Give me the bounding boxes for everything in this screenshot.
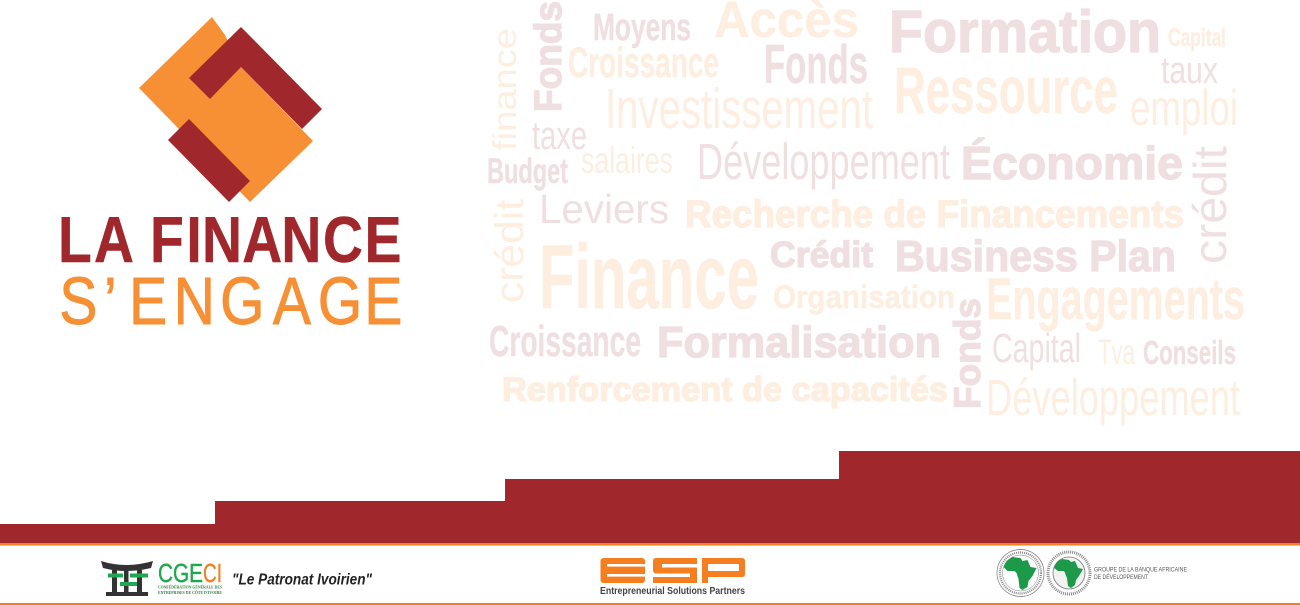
word: Leviers: Leviers (539, 186, 669, 232)
word: finance vertical: finance (486, 28, 523, 151)
word: Moyens: Moyens (593, 7, 691, 49)
icon: orange diamond (139, 17, 313, 202)
seal 1 (997, 550, 1044, 596)
icon: maroon upper bracket (189, 27, 322, 129)
word: Conseils: Conseils (1143, 334, 1236, 371)
word: Développement: Développement (697, 133, 950, 190)
word: Recherche de Financements: Recherche de Financements (685, 194, 1184, 236)
word: crédit vertical left: crédit (488, 199, 532, 303)
word: Tva: Tva (1098, 333, 1135, 372)
word: Budget: Budget (487, 152, 568, 191)
word: crédit vertical right: crédit (1184, 146, 1236, 264)
word cloud (486, 0, 1245, 426)
CGECI small caption: CONFÉDÉRATION GÉNÉRALE DES (158, 584, 223, 590)
word: Économie: Économie (961, 137, 1183, 189)
word: Finance: Finance (539, 227, 759, 328)
word: Fonds: Fonds (764, 33, 868, 95)
word: taux: taux (1161, 50, 1218, 92)
slogan: "Le Patronat Ivoirien" (232, 572, 372, 588)
word: emploi: emploi (1130, 80, 1238, 136)
icon: temple (101, 561, 153, 596)
word: taxe: taxe (532, 114, 587, 158)
word: Croissance: Croissance (568, 39, 719, 87)
CGECI wordmark: CGE (158, 558, 203, 588)
word: Investissement: Investissement (605, 77, 873, 141)
CGECI small caption: ENTREPRISES DE CÔTE D'IVOIRE (158, 590, 222, 595)
word: Organisation: Organisation (773, 279, 955, 315)
logo title: La Finance: LA FINANCE (58, 203, 402, 276)
orange rule under band (0, 543, 1300, 546)
word: Fonds vertical lower: Fonds (947, 298, 988, 409)
word: Croissance lower: Croissance (489, 317, 641, 366)
seal 2 (1048, 552, 1090, 594)
word: Capital small: Capital (1168, 24, 1226, 52)
word: Crédit: Crédit (770, 234, 873, 275)
group name: DE DÉVELOPPEMENT (1094, 572, 1148, 581)
word: Business Plan: Business Plan (895, 232, 1176, 281)
logo: ESP (600, 558, 745, 597)
logo: CGECI (101, 558, 372, 596)
orange bottom rule (0, 603, 1300, 605)
ESP tagline: Entrepreneurial Solutions Partners (600, 586, 745, 597)
ESP mark (600, 558, 745, 583)
group name: GROUPE DE LA BANQUE AFRICAINE (1094, 566, 1187, 574)
logo subtitle: S'engage: S’ENGAGE (59, 265, 402, 339)
word: Ressource: Ressource (894, 53, 1118, 127)
CGECI wordmark orange part: CI (203, 558, 222, 588)
word: Fonds vertical: Fonds (528, 1, 570, 112)
logo: African Development Bank Group (997, 550, 1187, 596)
word: Formalisation: Formalisation (657, 318, 941, 367)
maroon staircase band (0, 451, 1300, 543)
logo: La Finance s'engage (58, 17, 402, 339)
word: Renforcement de capacités: Renforcement de capacités (502, 371, 948, 409)
word: Capital: Capital (992, 325, 1081, 371)
icon: maroon lower bar (168, 119, 250, 202)
word: Formation: Formation (889, 0, 1161, 65)
word: salaires: salaires (581, 140, 673, 181)
